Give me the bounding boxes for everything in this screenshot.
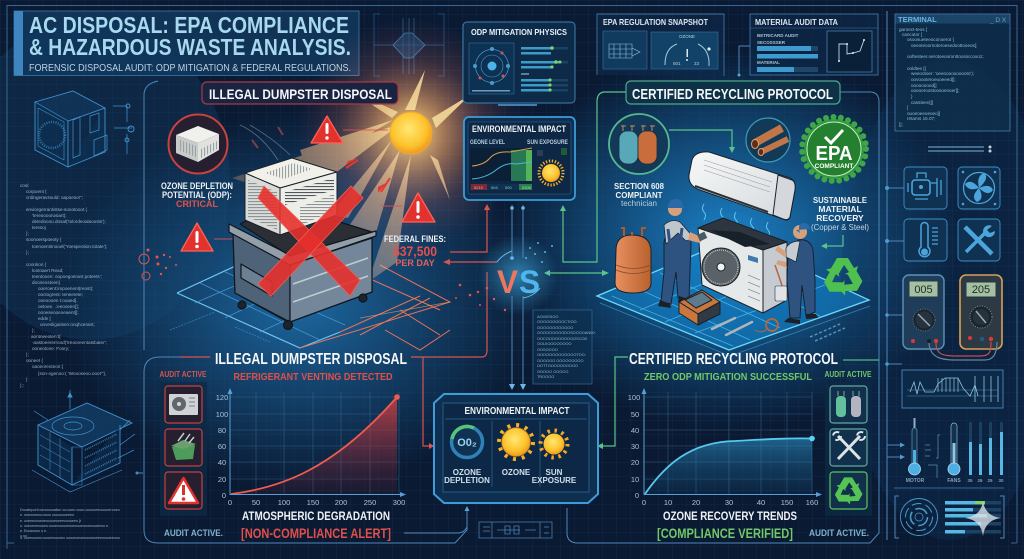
arrow xyxy=(821,235,843,249)
code note panel: OOSOOOO xyxy=(537,347,558,352)
axes xyxy=(230,392,404,494)
tools on floor xyxy=(712,318,778,335)
x axis labels: 160 xyxy=(806,498,818,507)
y axis labels: 0 xyxy=(222,491,226,500)
x axis labels xyxy=(642,498,818,507)
x axis labels: 0 xyxy=(642,498,646,507)
label: EXPOSURE xyxy=(532,476,577,485)
area xyxy=(231,397,397,494)
connector: chart to impact panel xyxy=(404,506,470,533)
label: federal fines: FEDERAL FINES: xyxy=(384,234,446,244)
code note panel: OOOOOOOOODOSOOOOAN00: xyxy=(537,330,596,335)
chart: atmospheric degradation xyxy=(216,388,406,507)
icon: thermometer xyxy=(904,219,947,261)
gauge: motor thermometer xyxy=(906,418,925,484)
code block: left: } xyxy=(26,377,28,382)
code note panel: OOOOO OOOOO xyxy=(537,369,568,374)
code note panel: OOOOOOOOOOOOOTOO: xyxy=(537,352,586,357)
subtitle: FORENSIC DISPOSAL AUDIT: ODP MITIGATION & FEDERAL REGULATIONS. xyxy=(29,62,351,74)
bar xyxy=(757,54,818,58)
display: 205 xyxy=(972,284,990,296)
label: MOTOR xyxy=(906,478,925,484)
bar xyxy=(757,46,818,51)
motion arcs xyxy=(240,125,290,160)
x axis labels: 250 xyxy=(364,498,376,507)
multimeter right xyxy=(960,275,1002,349)
level bars: 26 xyxy=(977,478,983,483)
sun glow and beams xyxy=(232,18,526,282)
title: AC DISPOSAL: EPA COMPLIANCE xyxy=(29,12,349,38)
mini line chart xyxy=(827,31,872,72)
x axis labels: 50 xyxy=(252,498,260,507)
icon: refrigerant cylinders xyxy=(609,114,669,174)
code block: left: unvesligatisen:onqhcerant; xyxy=(40,322,95,327)
red arrows to fines and impact panel xyxy=(443,204,497,265)
panel: illegal dumpster analysis heading: ILLEGAL DUMPSTER DISPOSAL xyxy=(215,351,407,368)
terminal code: ooooooood]] xyxy=(911,83,937,88)
icon: sun xyxy=(537,148,567,185)
thumbnail: unit blueprint xyxy=(603,31,647,69)
window controls: _ D X xyxy=(989,17,1007,24)
label: OZONE xyxy=(502,468,531,477)
code block: left: teentooen: oopoegoerant poteets'; xyxy=(32,274,102,279)
diagnostic traces xyxy=(925,435,940,478)
radar dial xyxy=(900,498,938,536)
icon: green dumpster xyxy=(165,429,202,466)
y axis labels: 20 xyxy=(218,475,226,484)
chart caption: atmospheric degradation: ATMOSPHERIC DEGRADATION xyxy=(242,511,390,523)
outdoor unit xyxy=(698,218,787,313)
illegal disposal pill: ILLEGAL DUMPSTER DISPOSAL xyxy=(209,86,392,102)
recovery machine xyxy=(679,290,720,325)
code note panel xyxy=(533,310,596,384)
label: SUN xyxy=(546,468,563,477)
terminal code: ]]; xyxy=(899,122,903,127)
floor grid: illegal xyxy=(170,250,450,350)
panel: environmental impact (top) xyxy=(464,117,575,200)
terminal code: ooldtee [[ xyxy=(907,66,927,71)
code block: left: dooneostoen} xyxy=(32,280,61,285)
code note panel: OOCOOOOOOOOOOSCOD xyxy=(537,336,588,341)
certified recycling pill: CERTIFIED RECYCLING PROTOCOL xyxy=(632,86,833,103)
code block: left: coontion { xyxy=(26,262,47,267)
icon: sun xyxy=(345,112,432,193)
icon: warning triangle top xyxy=(311,116,388,143)
y axis labels: 10 xyxy=(631,475,639,484)
panel: EPA regulation snapshot xyxy=(597,14,724,76)
area xyxy=(645,438,812,494)
code block: left: }; xyxy=(26,352,29,357)
code block: left: lootoaert Read; xyxy=(32,268,63,273)
ozone ring xyxy=(452,426,482,458)
line chart xyxy=(470,148,532,190)
terminal code: cassteen[]] xyxy=(911,100,933,105)
x axis labels: 0 xyxy=(228,498,232,507)
axes xyxy=(644,392,820,494)
line chart: 5h5 xyxy=(491,185,498,190)
scanner status panel xyxy=(895,496,1004,538)
code block: left: {son-ogenoo:( 'Woooseoo.ooot'"}, xyxy=(38,371,106,376)
x axis labels: 20 xyxy=(692,498,700,507)
icon: fan xyxy=(958,167,1000,209)
icon: cylinders xyxy=(830,386,867,423)
code block: left: toenoentimooel('Yoespeotion.totate'); xyxy=(32,244,107,249)
code block: left xyxy=(20,183,107,388)
audit active footer: right: AUDIT ACTIVE. xyxy=(809,528,869,539)
icon: window AC in circle xyxy=(168,114,228,174)
icon: warning xyxy=(165,472,202,509)
heading: MATERIAL AUDIT DATA xyxy=(755,17,838,27)
code block: left: }; xyxy=(26,250,29,255)
label: COMPLIANT xyxy=(616,190,663,200)
blueprint diagram: top xyxy=(374,14,444,76)
technician left xyxy=(658,199,707,308)
fine print: bottom left: e. ooeeeoooeoeooooeoeeeooooeeo [t xyxy=(20,519,81,523)
level bars: 25 xyxy=(987,478,993,483)
y axis labels: 40 xyxy=(631,426,639,435)
VS divider xyxy=(478,205,558,390)
code block: left: detedoooo.dosal('tolordeoalaoosts'); xyxy=(32,219,106,224)
label: SUSTAINABLE xyxy=(813,195,867,205)
label: ozone level: GEONE LEVEL xyxy=(470,140,505,146)
panel: material audit data xyxy=(750,14,878,75)
status bars xyxy=(945,501,1001,534)
fine print: bottom left xyxy=(20,508,120,540)
x axis labels: 300 xyxy=(393,498,405,507)
sparkle xyxy=(965,501,1001,536)
y axis labels: 50 xyxy=(631,410,639,419)
fine print: bottom left: o oo xyxy=(20,534,27,538)
level bars: 35 xyxy=(967,478,973,483)
fine print: bottom left: e. Eoosooeo o e. xyxy=(20,529,47,533)
panel: certified recycling heading: CERTIFIED RECYCLING PROTOCOL xyxy=(629,351,838,368)
x axis labels: 200 xyxy=(335,498,347,507)
display: 005 xyxy=(914,284,933,296)
VS divider: V xyxy=(497,264,519,300)
code block: left: -aastoeererrood('treooreentatsbater'; xyxy=(32,340,107,345)
code block: left: ooneet { xyxy=(26,358,43,363)
code note panel: OOLIIOOOOOOOO xyxy=(537,341,572,346)
code note panel: TROOOO xyxy=(537,374,554,379)
heading: ENVIRONMENTAL IMPACT xyxy=(464,406,570,417)
label: per day: PER DAY xyxy=(395,258,435,268)
terminal code: ooftesteer.oerotoeooronttoosoo;ooo1; xyxy=(907,54,984,59)
subhead: zero ODP: ZERO ODP MITIGATION SUCCESSFUL xyxy=(644,371,813,383)
icon: recycle symbol xyxy=(819,258,866,299)
fine print: bottom left: Doosteportt:oeoooooation oo:ooeo oooo oooooeeooooorrooeo xyxy=(20,508,120,512)
terminal code: cancotor [ xyxy=(902,32,923,37)
VS divider: S xyxy=(519,264,540,300)
terminal title: TERMINAL xyxy=(898,15,937,24)
line chart: 500 xyxy=(505,185,512,190)
y axis labels: 100 xyxy=(216,410,228,419)
y axis labels: 20 xyxy=(631,458,639,467)
subhead: refrigerant venting: REFRIGERANT VENTING DETECTED xyxy=(234,371,393,383)
illegal disposal pill xyxy=(202,82,398,104)
label: (Copper & Steel) xyxy=(811,223,869,232)
mini schematic strip xyxy=(479,522,552,538)
code block: left: enviorgerrantistse-soootooot { xyxy=(26,207,87,212)
multimeter left xyxy=(903,275,944,349)
code block: left: oetoee. .:eeooeen[]; xyxy=(38,304,79,309)
x axis labels: 150 xyxy=(307,498,319,507)
icon: small sun xyxy=(540,430,568,458)
icon: warning triangle right xyxy=(381,193,435,222)
y axis labels: 60 xyxy=(218,442,226,451)
certified frame lines xyxy=(544,92,879,543)
y axis labels: 80 xyxy=(218,426,226,435)
label: ozone depletion: OZONE DEPLETION xyxy=(161,181,233,191)
label: material: MATERIAL xyxy=(757,60,780,65)
title block xyxy=(14,11,359,76)
gridlines xyxy=(644,392,812,494)
icon: large sun xyxy=(499,425,533,459)
chart caption: ozone recovery: OZONE RECOVERY TRENDS xyxy=(663,511,797,523)
terminal code: oovoooteroeuoeeed]]; xyxy=(911,77,956,82)
terminal code: weeootoer: 'oeeoooooooooto'); xyxy=(911,71,974,76)
technician right xyxy=(775,223,818,324)
dumpster body xyxy=(229,204,376,330)
terminal code: ] xyxy=(907,105,908,110)
icon: motor xyxy=(904,167,947,209)
gridlines xyxy=(230,392,399,494)
icon: recycle xyxy=(830,472,867,509)
line chart: 5215 xyxy=(474,185,484,190)
title line two: & HAZARDOUS WASTE ANALYSIS. xyxy=(29,34,351,60)
panel: environmental impact (bottom) xyxy=(434,394,598,503)
code block: left: ooctogrent: teneerete; xyxy=(38,292,83,297)
thumbnail: ozone gauge: 501 xyxy=(673,61,681,66)
terminal code: retarns 15.07; xyxy=(907,116,935,121)
fine print: bottom left: e. ooeoooeoo:oooo oooooooeeeo xyxy=(20,513,74,517)
label: SECTION 608 xyxy=(614,181,664,191)
icon: tools xyxy=(830,429,867,466)
code block: left: crdingeravsould: oapoeoo!"; xyxy=(26,195,83,200)
certified recycling pill xyxy=(626,81,840,104)
fine print: bottom left: o: ooeeoooeo:oooeeooooeo ooooeoeoeooooeoeeeooooeeooo xyxy=(20,536,120,540)
terminal code: } xyxy=(911,94,913,99)
badge: EPA compliant xyxy=(802,117,866,181)
label: sun exposure: SUN EXPOSURE xyxy=(527,140,568,146)
heading: ENVIRONMENTAL IMPACT xyxy=(472,124,566,135)
y axis labels xyxy=(628,393,640,500)
label: MATERIAL xyxy=(818,204,862,214)
window AC unit xyxy=(245,158,337,235)
ozone depletion callout xyxy=(161,114,233,209)
chart: ozone recovery trends xyxy=(628,388,822,507)
code block: left: };: xyxy=(20,383,24,388)
code block: left: aontneeoten:t{ xyxy=(31,334,61,339)
x axis labels xyxy=(228,498,405,507)
wall AC unit xyxy=(689,152,795,220)
audit active tag: left: AUDIT ACTIVE xyxy=(160,370,207,379)
blueprint: outdoor unit xyxy=(35,91,134,167)
panel: ODP mitigation physics xyxy=(463,22,575,105)
y axis labels xyxy=(216,393,228,500)
arrow: cylinders to wall unit xyxy=(669,130,735,153)
x axis labels: 30 xyxy=(725,498,733,507)
figure: fine amount: $37,500 xyxy=(393,243,437,259)
code block: left: soonoerspoeoty { xyxy=(26,237,62,242)
icon column: certified xyxy=(825,382,872,516)
code block: left: oooeseooeoeaent[]; xyxy=(38,310,79,315)
x axis labels: 150 xyxy=(781,498,793,507)
code block: left: oaoeoreoteon:{ xyxy=(32,364,64,369)
label: critical: CRITICAL xyxy=(176,199,218,209)
y axis labels: 30 xyxy=(631,442,639,451)
terminal code: ooeoeroostoosoenoer[]; xyxy=(911,88,960,93)
label: RECOVERY xyxy=(816,213,864,223)
blueprint: isometric condenser xyxy=(32,390,135,492)
label: audit: BETRICARD AUDIT xyxy=(757,33,799,38)
label: OZONE xyxy=(453,468,482,477)
bar xyxy=(757,67,818,72)
icon: tools xyxy=(958,219,1000,261)
code block: left: ooeoooen t:ooaed]. xyxy=(38,298,78,303)
code note panel: OOOOOO OOOOOOOOO xyxy=(537,358,583,363)
code block: left: cosi: xyxy=(20,183,29,188)
label: technician xyxy=(621,199,657,208)
alert: non-compliance: [NON-COMPLIANCE ALERT] xyxy=(241,526,391,541)
orange refrigerant cylinder xyxy=(615,228,651,293)
end point xyxy=(809,436,815,441)
terminal code: oeeoteoornoteroesedoottooeos]; xyxy=(911,43,977,48)
illegal disposal frame lines xyxy=(136,81,487,543)
line chart: 5309 xyxy=(522,185,532,190)
code note panel: OOOOOOOOOOOO xyxy=(537,325,573,330)
label: DEPLETION xyxy=(444,476,490,485)
platform grid xyxy=(597,238,870,356)
code block: left: ooeroent:impoenent(reost); xyxy=(38,286,93,291)
terminal code: garoect-teos { xyxy=(899,27,928,32)
curve xyxy=(231,397,397,494)
audit active footer: left: AUDIT ACTIVE. xyxy=(164,528,223,539)
x axis labels: 40 xyxy=(757,498,765,507)
terminal panel xyxy=(895,14,1010,131)
curve xyxy=(645,438,812,494)
thumbnail: ozone gauge: 23 xyxy=(694,61,700,66)
end point xyxy=(394,394,400,400)
code block: left: edde [ xyxy=(38,316,51,321)
label: sessions: SECOSSSER xyxy=(757,40,786,45)
dumpster with window AC xyxy=(229,125,376,330)
thumbnail: ozone gauge: OZONE xyxy=(679,34,695,39)
code block: left: 'tereoooorusiart); xyxy=(32,213,67,218)
audit active tag: right: AUDIT ACTIVE xyxy=(824,370,872,379)
x axis labels: 10 xyxy=(664,498,672,507)
multimeter leads xyxy=(929,342,997,360)
code block: left: }; xyxy=(32,328,35,333)
code note panel: OOOOOOOOOCTIOO xyxy=(537,319,577,324)
vapor lines xyxy=(702,204,770,238)
x axis labels: 100 xyxy=(278,498,290,507)
fine print: bottom left: o. ooeoeoeoooeo:oooeoooooeooeoooeoooeoooeeoo e. xyxy=(20,524,109,528)
code block: left: ooneotone: Foory; xyxy=(32,346,69,351)
terminal code xyxy=(899,27,984,127)
heading: EPA REGULATION SNAPSHOT xyxy=(603,17,709,27)
code note panel: OOTTOOOOOOOOOO xyxy=(537,363,578,368)
code block: left: corpoent { xyxy=(26,189,47,194)
terminal code: ouoeoeeoeoeo]] xyxy=(907,111,940,116)
red particles xyxy=(139,248,506,311)
right column trunk line xyxy=(885,11,992,540)
federal fines callout xyxy=(384,234,446,268)
icon: copper pipes xyxy=(746,118,790,162)
icon column: illegal xyxy=(160,382,207,516)
label: potential ODP: POTENTIAL (ODP): xyxy=(162,190,232,200)
thumbnail: ozone gauge xyxy=(651,32,718,69)
gauge: fans thermometer xyxy=(947,423,961,484)
y axis labels: 0 xyxy=(635,491,639,500)
code block: left: teresoj xyxy=(32,225,46,230)
code note panel: ACMIOSOO xyxy=(537,314,558,319)
red X xyxy=(258,186,363,296)
y axis labels: 100 xyxy=(628,393,640,402)
y axis labels: 40 xyxy=(218,458,226,467)
heading: ODP MITIGATION PHYSICS xyxy=(471,27,567,37)
sustainable recovery callout xyxy=(811,195,869,249)
waveform display xyxy=(902,370,1003,408)
y axis labels: 120 xyxy=(216,393,228,402)
section 608 callout xyxy=(609,114,669,208)
icon: outdoor AC xyxy=(165,386,202,423)
label: FANS xyxy=(947,478,961,484)
code block: left: }; xyxy=(26,231,29,236)
level bars xyxy=(967,422,1004,483)
verdict: compliance verified: [COMPLIANCE VERIFIED] xyxy=(657,526,793,541)
ozone ring: O0₂ xyxy=(457,437,477,449)
terminal code: osoosueteeoconoerot { xyxy=(907,37,954,42)
connector: audit panel xyxy=(738,46,750,76)
bars xyxy=(521,46,568,92)
badge: EPA compliant: COMPLIANT xyxy=(815,163,853,170)
level bars: 30 xyxy=(998,478,1004,483)
atom diagram xyxy=(469,43,514,94)
badge: EPA compliant: EPA xyxy=(816,143,852,165)
icon: warning triangle left xyxy=(181,223,233,251)
